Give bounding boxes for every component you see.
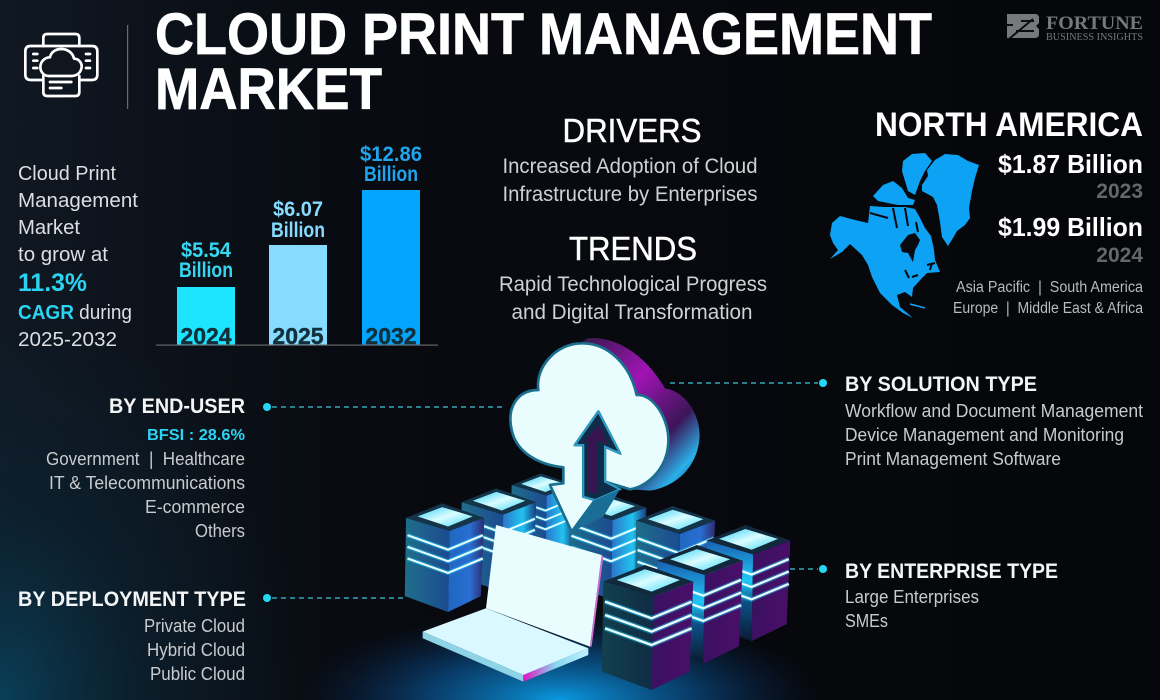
regional stats <box>998 149 1143 267</box>
regional heading: North America: NORTH AMERICA <box>875 106 1143 144</box>
bar chart: market size <box>156 143 438 349</box>
text block: market growth: Management <box>18 189 138 212</box>
drivers <box>502 112 758 206</box>
segment: by solution type: Workflow and Document Management <box>845 401 1143 421</box>
segment: by enterprise type: BY ENTERPRISE TYPE <box>845 560 1058 583</box>
segment: by solution type: BY SOLUTION TYPE <box>845 373 1037 396</box>
drivers: Infrastructure by Enterprises <box>502 183 758 206</box>
server stack: back row <box>405 473 715 616</box>
other regions: Europe | Middle East & Africa <box>953 300 1143 317</box>
segment: by enterprise type: SMEs <box>845 611 888 631</box>
text block: market growth: Market <box>18 216 80 239</box>
illustration: cloud, servers, laptop <box>405 338 790 690</box>
bar: 2032 <box>360 143 422 349</box>
bar: 2024: 2024 <box>180 323 232 349</box>
other regions: Asia Pacific | South America <box>956 279 1143 296</box>
segment: by solution type: Print Management Software <box>845 449 1061 469</box>
segment: by deployment type: Private Cloud <box>144 616 245 636</box>
text block: market growth: Cloud Print <box>18 162 116 185</box>
text block: market growth: 11.3% <box>18 269 87 297</box>
trends <box>499 230 767 324</box>
regional stats: $1.99 Billion <box>998 212 1143 242</box>
bar: 2032: 2032 <box>365 323 417 349</box>
laptop <box>423 525 603 682</box>
regional stats: 2024 <box>1096 244 1143 267</box>
header divider <box>127 25 128 109</box>
segment: by end-user: Others <box>195 521 245 541</box>
regional stats: 2023 <box>1096 180 1143 203</box>
bar: 2025 <box>269 198 327 349</box>
trends: and Digital Transformation <box>512 301 752 324</box>
server stack: front row <box>656 525 790 664</box>
bar: 2024: $5.54 <box>181 239 231 262</box>
bar: 2024: Billion <box>179 259 233 282</box>
bar: 2025: Billion <box>271 219 325 242</box>
segment: by enterprise type: Large Enterprises <box>845 587 979 607</box>
segment: by solution type: Device Management and Monitoring <box>845 425 1124 445</box>
bar: 2032: $12.86 <box>360 143 422 166</box>
icon: cloud printer <box>25 34 97 96</box>
drivers: Increased Adoption of Cloud <box>502 155 758 178</box>
segment: by end-user: E-commerce <box>145 497 245 517</box>
segment: by end-user: IT & Telecommunications <box>49 473 245 493</box>
bar: 2025: $6.07 <box>273 198 323 221</box>
bar: 2024 <box>177 239 235 349</box>
bar: 2025: 2025 <box>272 323 324 349</box>
segment: by deployment type: BY DEPLOYMENT TYPE <box>18 588 246 611</box>
segment: by end-user: BFSI : 28.6% <box>147 427 245 444</box>
segment: by end-user: Government | Healthcare <box>46 449 245 469</box>
cloud with upload and download arrows <box>510 338 700 532</box>
title: MARKET <box>155 57 382 122</box>
regional stats: $1.87 Billion <box>998 149 1143 179</box>
title: CLOUD PRINT MANAGEMENT <box>155 2 932 67</box>
segment: by deployment type: Hybrid Cloud <box>147 640 245 660</box>
segment: by enterprise type <box>845 560 1058 631</box>
other regions <box>953 279 1143 317</box>
segment: by deployment type: Public Cloud <box>150 664 245 684</box>
trends: TRENDS <box>569 230 697 267</box>
segment: by end-user: BY END-USER <box>109 395 245 418</box>
text block: market growth <box>18 162 138 351</box>
map: North America <box>830 153 979 318</box>
logo: Fortune Business Insights: FORTUNE <box>1046 13 1143 34</box>
bar: 2032: Billion <box>364 163 418 186</box>
text block: market growth: CAGR during <box>18 301 132 324</box>
text block: market growth: 2025-2032 <box>18 328 117 351</box>
segment: by solution type <box>845 373 1143 469</box>
segment: by deployment type <box>18 588 246 684</box>
drivers: DRIVERS <box>562 112 702 149</box>
segment: by end-user <box>46 395 245 541</box>
logo: Fortune Business Insights <box>1007 13 1143 43</box>
title <box>155 2 932 122</box>
server: foreground <box>602 565 693 690</box>
trends: Rapid Technological Progress <box>499 273 767 296</box>
text block: market growth: to grow at <box>18 243 108 266</box>
logo: Fortune Business Insights: BUSINESS INSIGHTS <box>1046 32 1143 43</box>
connector lines and dots <box>263 379 827 602</box>
